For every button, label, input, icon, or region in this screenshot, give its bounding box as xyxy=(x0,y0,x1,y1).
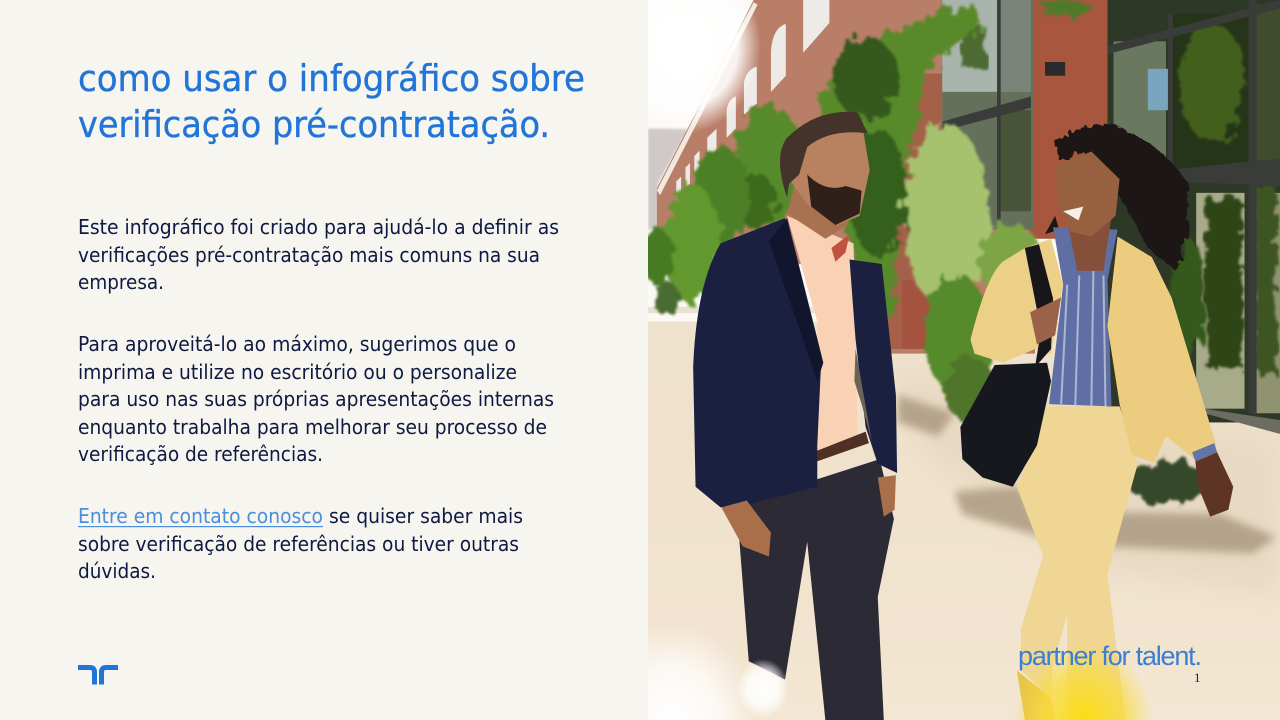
building: brick facade xyxy=(657,0,1112,354)
text block: intro xyxy=(78,215,559,294)
bag strap and bag xyxy=(1025,244,1053,367)
icon: logo xyxy=(78,668,118,684)
photo: two colleagues walking xyxy=(648,0,1280,720)
text block: intro: empresa. xyxy=(78,270,164,294)
neck and head xyxy=(787,174,850,239)
title xyxy=(78,57,585,146)
shirt xyxy=(787,216,858,459)
pavement shadows xyxy=(898,395,1277,553)
shirt xyxy=(1049,227,1118,406)
hand xyxy=(1030,298,1061,344)
title: como usar o infográfico sobre xyxy=(78,57,585,100)
hands xyxy=(721,501,771,557)
text block: usage suggestion: imprima e utilize no escritório ou o personalize xyxy=(78,360,517,384)
text block: contact: se quiser saber mais xyxy=(329,504,523,528)
text block: usage suggestion: Para aproveitá-lo ao máximo, sugerimos que o xyxy=(78,332,516,356)
hair xyxy=(780,112,868,197)
text block: contact: sobre verificação de referências ou tiver outras xyxy=(78,532,519,556)
person: man in navy suit xyxy=(693,112,897,720)
hair xyxy=(1055,124,1188,271)
text block: usage suggestion: enquanto trabalha para melhorar seu processo de xyxy=(78,415,547,439)
text block: contact xyxy=(78,504,523,583)
jacket xyxy=(970,239,1063,363)
text block: usage suggestion: para uso nas suas próprias apresentações internas xyxy=(78,387,554,411)
trousers xyxy=(737,459,894,720)
text block: contact: dúvidas. xyxy=(78,559,156,583)
plants: climbing greenery xyxy=(642,1,1208,504)
light flares xyxy=(648,0,1152,720)
text block: usage suggestion xyxy=(78,332,554,466)
shoe xyxy=(1017,670,1055,720)
title: verificação pré-contratação. xyxy=(78,103,550,146)
jacket xyxy=(693,218,821,507)
neck and head xyxy=(1067,216,1112,271)
text block: intro: Este infográfico foi criado para ajudá-lo a definir as xyxy=(78,215,559,239)
windows: glass with reflected greenery xyxy=(942,0,1280,434)
arched windows xyxy=(676,0,829,197)
right hand and cuff xyxy=(1192,443,1217,461)
panel: text column xyxy=(78,57,585,684)
tagline: partner for talent: partner for talent. xyxy=(1018,641,1202,671)
text block: intro: verificações pré-contratação mais comuns na sua xyxy=(78,243,540,267)
text block: usage suggestion: verificação de referências. xyxy=(78,442,323,466)
background: sky and pavement xyxy=(648,0,1280,720)
belt xyxy=(813,432,869,462)
beard xyxy=(807,174,862,225)
page number: 1 xyxy=(1194,670,1200,685)
person: woman in yellow suit xyxy=(960,124,1233,720)
trousers xyxy=(1017,406,1138,720)
text block: contact: Entre em contato conosco xyxy=(78,504,323,528)
